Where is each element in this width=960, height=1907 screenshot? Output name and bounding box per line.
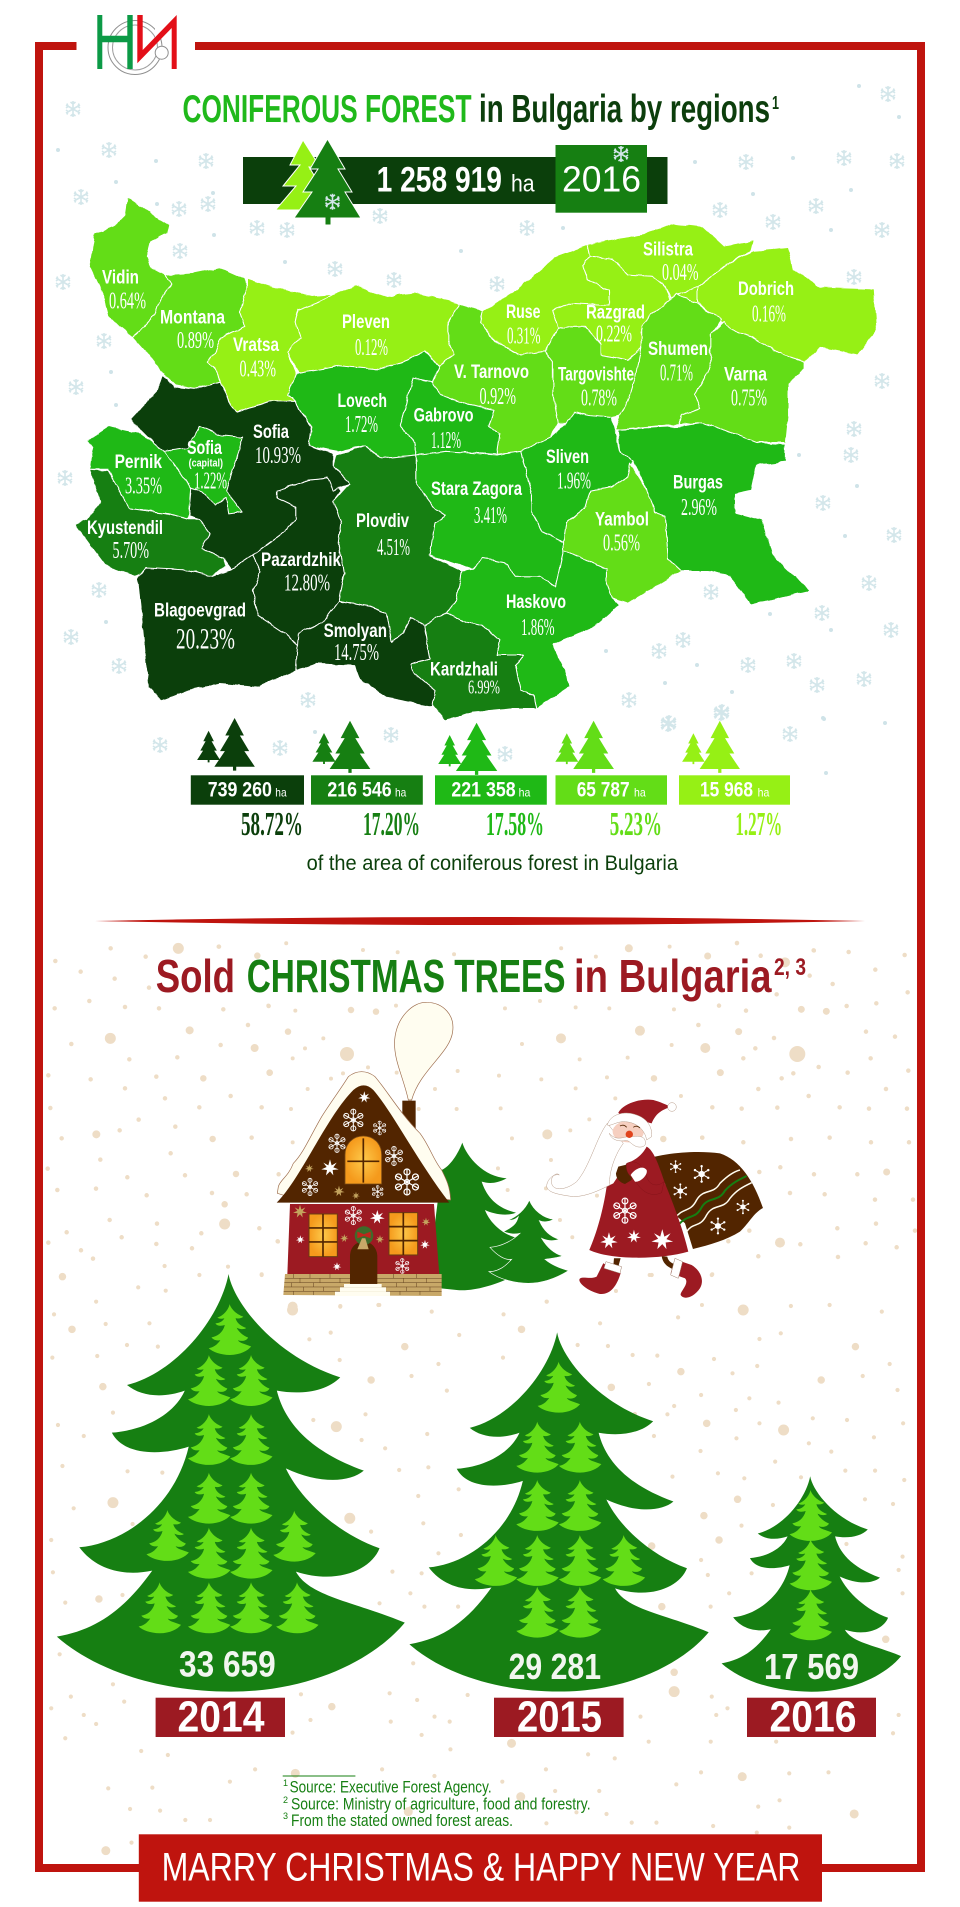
region labels: 0.43% bbox=[240, 356, 276, 382]
region: V. Tarnovo bbox=[432, 303, 558, 455]
region labels: 4.51% bbox=[377, 535, 410, 561]
region labels: Vratsa bbox=[233, 335, 279, 356]
region labels: Ruse bbox=[506, 302, 540, 323]
legend item: darkest bbox=[191, 718, 304, 843]
region labels: Dobrich bbox=[738, 279, 794, 300]
legend item: lime: ha bbox=[634, 786, 646, 800]
region: Razgrad bbox=[553, 257, 671, 360]
region labels: Smolyan bbox=[324, 621, 387, 642]
region: Vidin bbox=[89, 198, 171, 337]
region labels: 10.93% bbox=[255, 443, 301, 469]
total area banner: ha bbox=[511, 171, 535, 198]
region: Stara Zagora bbox=[416, 451, 564, 587]
region: Pernik bbox=[87, 426, 191, 519]
region: Plovdiv bbox=[333, 446, 462, 642]
legend item: dark green: ha bbox=[395, 786, 407, 800]
legend item: darkest: 739 260 bbox=[208, 779, 272, 802]
tree values bbox=[179, 1644, 859, 1687]
region labels: Plovdiv bbox=[356, 511, 409, 532]
region: Burgas bbox=[617, 423, 810, 605]
region: Montana bbox=[132, 267, 247, 389]
title: sold christmas trees: in Bulgaria bbox=[574, 950, 772, 1002]
legend item: green: 17.58% bbox=[486, 806, 544, 843]
total area banner: 2016 bbox=[562, 159, 641, 200]
title: sold christmas trees bbox=[156, 950, 806, 1002]
region labels: 0.31% bbox=[507, 324, 540, 350]
region labels: Sofia bbox=[253, 422, 289, 443]
region labels: Sofia bbox=[187, 438, 222, 459]
region labels: 1.96% bbox=[557, 468, 591, 494]
region labels: Lovech bbox=[338, 391, 387, 412]
region labels: Sliven bbox=[546, 447, 589, 468]
title: coniferous forest: CONIFEROUS FOREST bbox=[182, 88, 472, 131]
region labels: 3.41% bbox=[474, 503, 507, 529]
title: coniferous forest: 1 bbox=[772, 93, 779, 113]
icon: chimney smoke bbox=[395, 1002, 453, 1100]
region labels: Gabrovo bbox=[414, 405, 474, 426]
greeting banner bbox=[139, 1834, 822, 1902]
region labels: Vidin bbox=[102, 268, 139, 289]
legend bbox=[191, 718, 790, 843]
map of Bulgaria by region bbox=[75, 198, 877, 721]
total area banner: 1 258 919 bbox=[377, 161, 502, 200]
footnotes: 3 bbox=[283, 1811, 288, 1821]
title: coniferous forest: in Bulgaria by regions bbox=[479, 88, 770, 131]
legend item: lime: 65 787 bbox=[577, 779, 630, 802]
region labels: Blagoevgrad bbox=[154, 600, 246, 621]
region: Sliven bbox=[521, 412, 633, 542]
legend item: lime: 5.23% bbox=[610, 806, 662, 843]
region: Lovech bbox=[288, 351, 439, 459]
region: Smolyan bbox=[296, 601, 435, 707]
region labels: 1.12% bbox=[431, 428, 461, 454]
region labels: V. Tarnovo bbox=[454, 362, 529, 383]
tan snow dots background bbox=[48, 943, 915, 1851]
region labels: 1.72% bbox=[345, 412, 378, 438]
greeting banner: MARRY CHRISTMAS & HAPPY NEW YEAR bbox=[162, 1846, 800, 1890]
icon: Santa Claus bbox=[547, 1100, 763, 1298]
region labels: 12.80% bbox=[284, 571, 330, 597]
region labels: Shumen bbox=[648, 339, 708, 360]
legend item: yellow-green: 15 968 bbox=[700, 779, 753, 802]
region: Blagoevgrad bbox=[138, 555, 298, 701]
region: Ruse bbox=[481, 244, 609, 355]
legend item: darkest: ha bbox=[275, 786, 287, 800]
footnotes bbox=[283, 1776, 591, 1830]
region labels: 14.75% bbox=[334, 640, 379, 666]
title: sold christmas trees: 2, 3 bbox=[774, 954, 806, 981]
region: Vratsa bbox=[207, 278, 333, 412]
icon: fir tree front bbox=[489, 1200, 569, 1283]
tree: 2014 bbox=[57, 1274, 405, 1692]
legend item: darkest: 58.72% bbox=[241, 806, 303, 843]
year labels: 2014 bbox=[178, 1693, 265, 1742]
legend item: yellow-green bbox=[679, 721, 790, 843]
region labels: 0.22% bbox=[596, 321, 632, 347]
region labels: Kardzhali bbox=[430, 660, 498, 681]
region labels: 0.12% bbox=[355, 335, 388, 361]
icon: house bbox=[277, 1072, 451, 1296]
footnotes: From the stated owned forest areas. bbox=[291, 1811, 513, 1830]
region labels: Targovishte bbox=[558, 365, 634, 386]
tree values: 17 569 bbox=[764, 1646, 859, 1687]
region labels: 0.89% bbox=[177, 328, 214, 354]
region labels: 0.04% bbox=[662, 260, 698, 286]
title: sold christmas trees: CHRISTMAS TREES bbox=[247, 950, 565, 1002]
region labels: 0.56% bbox=[603, 531, 640, 557]
footnotes: 1 bbox=[283, 1778, 288, 1788]
region: Shumen bbox=[614, 294, 722, 430]
region labels: Pernik bbox=[115, 452, 162, 473]
legend item: dark green: 17.20% bbox=[363, 806, 420, 843]
legend item: dark green bbox=[311, 721, 423, 843]
region labels: 20.23% bbox=[176, 622, 235, 656]
region labels: 0.71% bbox=[660, 361, 693, 387]
year labels: 2015 bbox=[517, 1693, 602, 1742]
region labels: Stara Zagora bbox=[431, 479, 522, 500]
region labels: Silistra bbox=[643, 240, 693, 261]
legend item: green bbox=[435, 723, 547, 843]
region: Kyustendil bbox=[75, 469, 226, 576]
region: Dobrich bbox=[697, 248, 877, 362]
region labels: Kyustendil bbox=[87, 518, 163, 539]
region labels: 0.16% bbox=[752, 301, 786, 327]
region labels: Burgas bbox=[673, 472, 723, 494]
region labels: Razgrad bbox=[586, 303, 645, 324]
legend item: yellow-green: ha bbox=[758, 786, 770, 800]
region labels: (capital) bbox=[189, 457, 223, 469]
region labels bbox=[87, 240, 794, 698]
region: Yambol bbox=[564, 464, 681, 603]
region labels: 0.92% bbox=[480, 384, 516, 410]
region labels: 1.86% bbox=[521, 615, 554, 641]
region: Kardzhali bbox=[411, 612, 537, 721]
tree: 2015 bbox=[409, 1332, 709, 1692]
tree: 2016 bbox=[722, 1476, 901, 1692]
legend item: green: 221 358 bbox=[451, 779, 516, 802]
tree values: 33 659 bbox=[179, 1644, 276, 1685]
legend item: yellow-green: 1.27% bbox=[735, 806, 782, 843]
title: sold christmas trees: Sold bbox=[156, 950, 235, 1002]
region labels: 2.96% bbox=[681, 495, 717, 521]
illustration: house, fir trees and Santa bbox=[277, 1002, 763, 1298]
region labels: Pleven bbox=[342, 312, 390, 333]
region labels: Varna bbox=[724, 365, 767, 386]
region labels: Montana bbox=[160, 308, 225, 329]
region labels: 3.35% bbox=[125, 474, 162, 500]
footnotes: Source: Executive Forest Agency. bbox=[290, 1778, 492, 1797]
snowflake background bbox=[56, 86, 904, 773]
legend caption: of the area of coniferous forest in Bulgaria bbox=[307, 852, 678, 875]
icon: banner trees bbox=[276, 139, 361, 225]
legend item: green: ha bbox=[519, 786, 531, 800]
tree chart: sold Christmas trees bbox=[57, 1274, 901, 1692]
region: Sofia bbox=[130, 375, 349, 569]
region: Sofia capital bbox=[164, 426, 242, 514]
region: Silistra bbox=[588, 223, 754, 298]
icon: fir tree back bbox=[435, 1143, 518, 1290]
logo bbox=[97, 15, 185, 74]
region: Pazardzhik bbox=[253, 478, 344, 646]
legend item: dark green: 216 546 bbox=[327, 779, 392, 802]
region: Haskovo bbox=[446, 550, 620, 709]
region: Varna bbox=[679, 321, 805, 442]
total area banner bbox=[243, 139, 668, 225]
region labels: Pazardzhik bbox=[261, 550, 341, 571]
region labels: 5.70% bbox=[112, 538, 149, 564]
footnotes: 2 bbox=[283, 1795, 288, 1805]
region labels: 0.64% bbox=[109, 289, 146, 315]
region: Gabrovo bbox=[400, 378, 499, 455]
region labels: 6.99% bbox=[468, 676, 500, 698]
year labels bbox=[156, 1693, 876, 1742]
tree values: 29 281 bbox=[509, 1646, 601, 1687]
region labels: 0.75% bbox=[731, 386, 767, 412]
region: Targovishte bbox=[545, 326, 641, 423]
region: Pleven bbox=[288, 285, 459, 373]
section divider bbox=[95, 917, 865, 925]
region labels: 1.22% bbox=[194, 468, 227, 494]
region labels: 0.78% bbox=[581, 386, 617, 412]
legend item: lime bbox=[555, 721, 667, 843]
year labels: 2016 bbox=[770, 1693, 856, 1742]
region labels: Yambol bbox=[595, 510, 649, 531]
region labels: Haskovo bbox=[506, 592, 566, 613]
footnotes: Source: Ministry of agriculture, food and forestry. bbox=[291, 1794, 591, 1813]
